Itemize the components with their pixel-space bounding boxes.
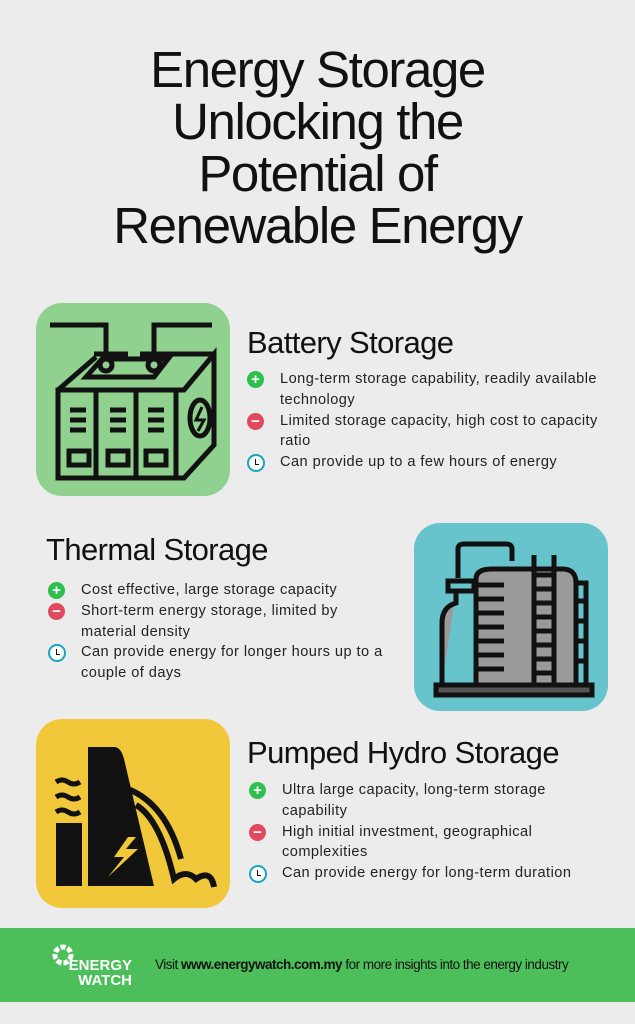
list: battery <box>247 371 598 472</box>
list: hydro: Ultra large capacity, long-term storage capability <box>282 782 546 819</box>
footer band <box>0 928 635 1002</box>
title: Unlocking the <box>172 93 463 150</box>
list: thermal: − <box>52 603 61 620</box>
list: thermal: Short-term energy storage, limited by material density <box>81 603 338 640</box>
list: battery: + <box>251 371 260 388</box>
icon: battery <box>36 303 230 496</box>
list: battery: − <box>251 413 260 430</box>
heading: pumped hydro storage: Pumped Hydro Storage <box>247 735 559 770</box>
heading: thermal storage: Thermal Storage <box>46 532 268 567</box>
list: hydro: Can provide energy for long-term duration <box>282 865 571 881</box>
footer text: Visit www.energywatch.com.my for more insights into the energy industry <box>155 957 568 972</box>
list: thermal: Can provide energy for longer hours up to a couple of days <box>81 644 383 681</box>
logo: energy watch <box>52 944 132 989</box>
list: thermal <box>48 582 383 681</box>
list: battery: Long-term storage capability, readily available technology <box>280 371 597 408</box>
title: Renewable Energy <box>113 197 522 254</box>
list: thermal: Cost effective, large storage capacity <box>81 582 337 598</box>
title: Potential of <box>198 145 437 202</box>
list: battery: Can provide up to a few hours of energy <box>280 454 557 470</box>
heading: battery storage: Battery Storage <box>247 325 453 360</box>
list: hydro: − <box>253 824 262 841</box>
logo: energy watch: WATCH <box>78 972 132 989</box>
logo: energy watch: ENERGY <box>69 957 132 974</box>
title <box>113 41 523 254</box>
list: hydro: + <box>253 782 262 799</box>
list: hydro <box>249 782 571 883</box>
icon: thermal tank <box>414 523 608 711</box>
icon: hydro dam <box>36 719 230 908</box>
title: Energy Storage <box>150 41 485 98</box>
list: thermal: + <box>52 582 61 599</box>
list: battery: Limited storage capacity, high cost to capacity ratio <box>280 413 598 449</box>
list: hydro: High initial investment, geographical complexities <box>282 824 532 860</box>
